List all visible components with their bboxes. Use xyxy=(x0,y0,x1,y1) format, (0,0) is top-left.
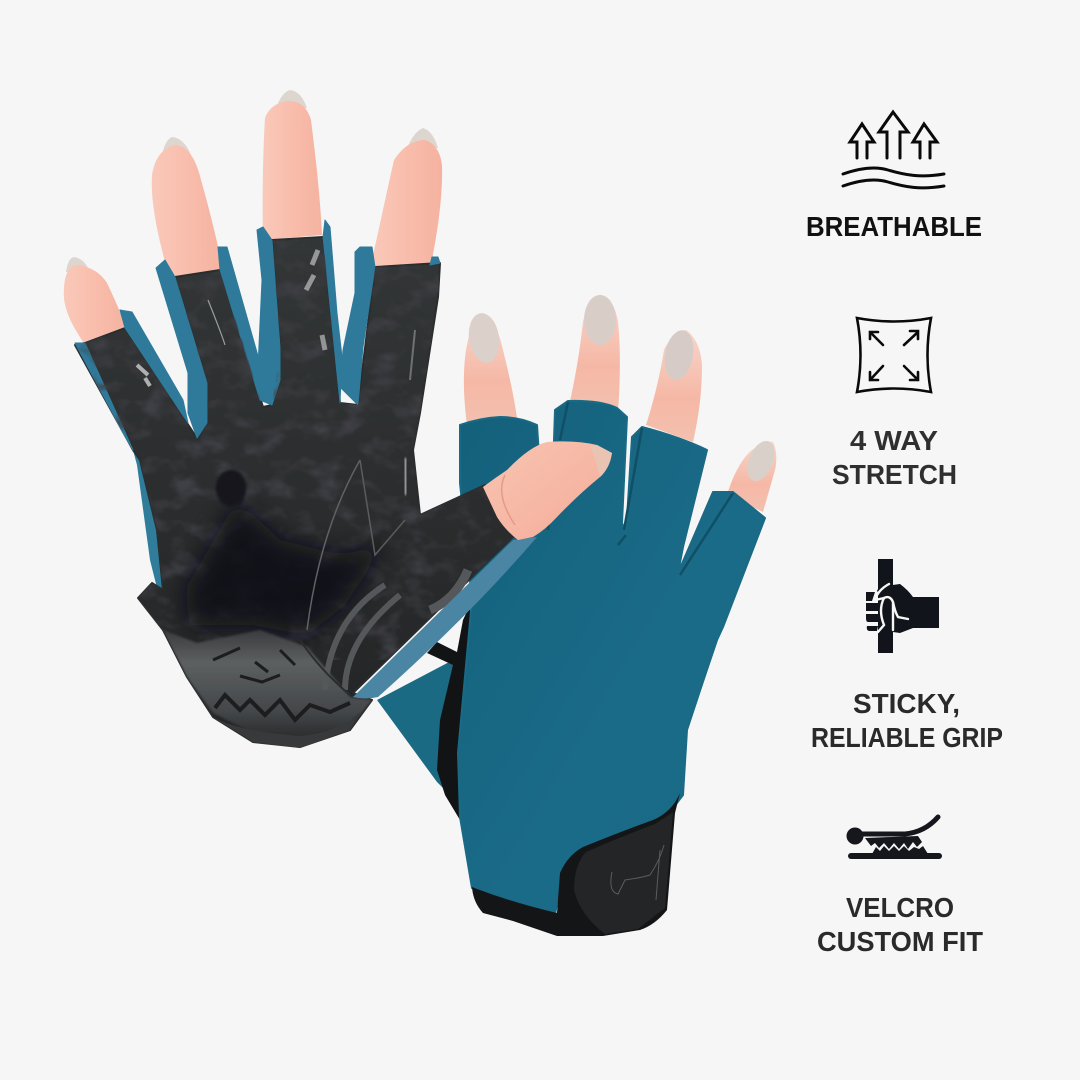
velcro strap xyxy=(472,793,680,936)
cuff band xyxy=(213,712,360,748)
black grip edge xyxy=(427,605,470,820)
feature: velcro custom fit xyxy=(817,817,983,957)
grey swirl bands near thumb xyxy=(325,570,468,690)
fingers of left hand xyxy=(64,101,442,345)
left sleeve of teal glove xyxy=(377,660,462,790)
label: sticky, reliable grip xyxy=(811,688,1003,753)
label: breathable: BREATHABLE xyxy=(806,211,982,242)
label: velcro custom fit xyxy=(817,892,983,957)
heel tread marks xyxy=(213,640,350,720)
feature: breathable xyxy=(806,112,982,242)
label: velcro custom fit: CUSTOM FIT xyxy=(817,926,983,957)
fingers of right hand xyxy=(464,295,780,512)
teal side lining xyxy=(133,450,165,600)
product photo: black palm glove xyxy=(60,90,612,748)
icon: arrows rising through fabric xyxy=(843,112,944,188)
label: 4 way stretch: STRETCH xyxy=(832,459,957,490)
nails behind left-hand fingers xyxy=(66,90,438,272)
product photo: teal back-of-hand glove xyxy=(377,295,780,936)
label: 4 way stretch xyxy=(832,425,957,490)
icon: hand gripping a bar xyxy=(866,559,939,653)
finger seams xyxy=(548,402,733,575)
teal glove body xyxy=(458,401,765,915)
feature: sticky reliable grip xyxy=(811,559,1003,753)
label: sticky, reliable grip: STICKY, xyxy=(853,688,960,719)
dark blotch xyxy=(216,470,246,506)
teal finger linings xyxy=(75,220,440,450)
feature: 4 way stretch xyxy=(832,318,957,490)
black palm with fingers xyxy=(75,237,513,747)
seam lines and highlights xyxy=(137,250,415,630)
mottled embossed pattern xyxy=(78,240,488,660)
thumb xyxy=(483,441,612,540)
light teal thumb underside xyxy=(353,537,537,698)
palm texture xyxy=(78,240,488,736)
icon: hook and loop strap xyxy=(846,817,942,859)
dark mass xyxy=(185,500,385,635)
label: 4 way stretch: 4 WAY xyxy=(850,425,938,456)
heel of the palm, glossy xyxy=(163,630,372,738)
label: sticky, reliable grip: RELIABLE GRIP xyxy=(811,722,1003,753)
label: velcro custom fit: VELCRO xyxy=(846,892,954,923)
icon: stretched square with four arrows xyxy=(857,318,931,392)
